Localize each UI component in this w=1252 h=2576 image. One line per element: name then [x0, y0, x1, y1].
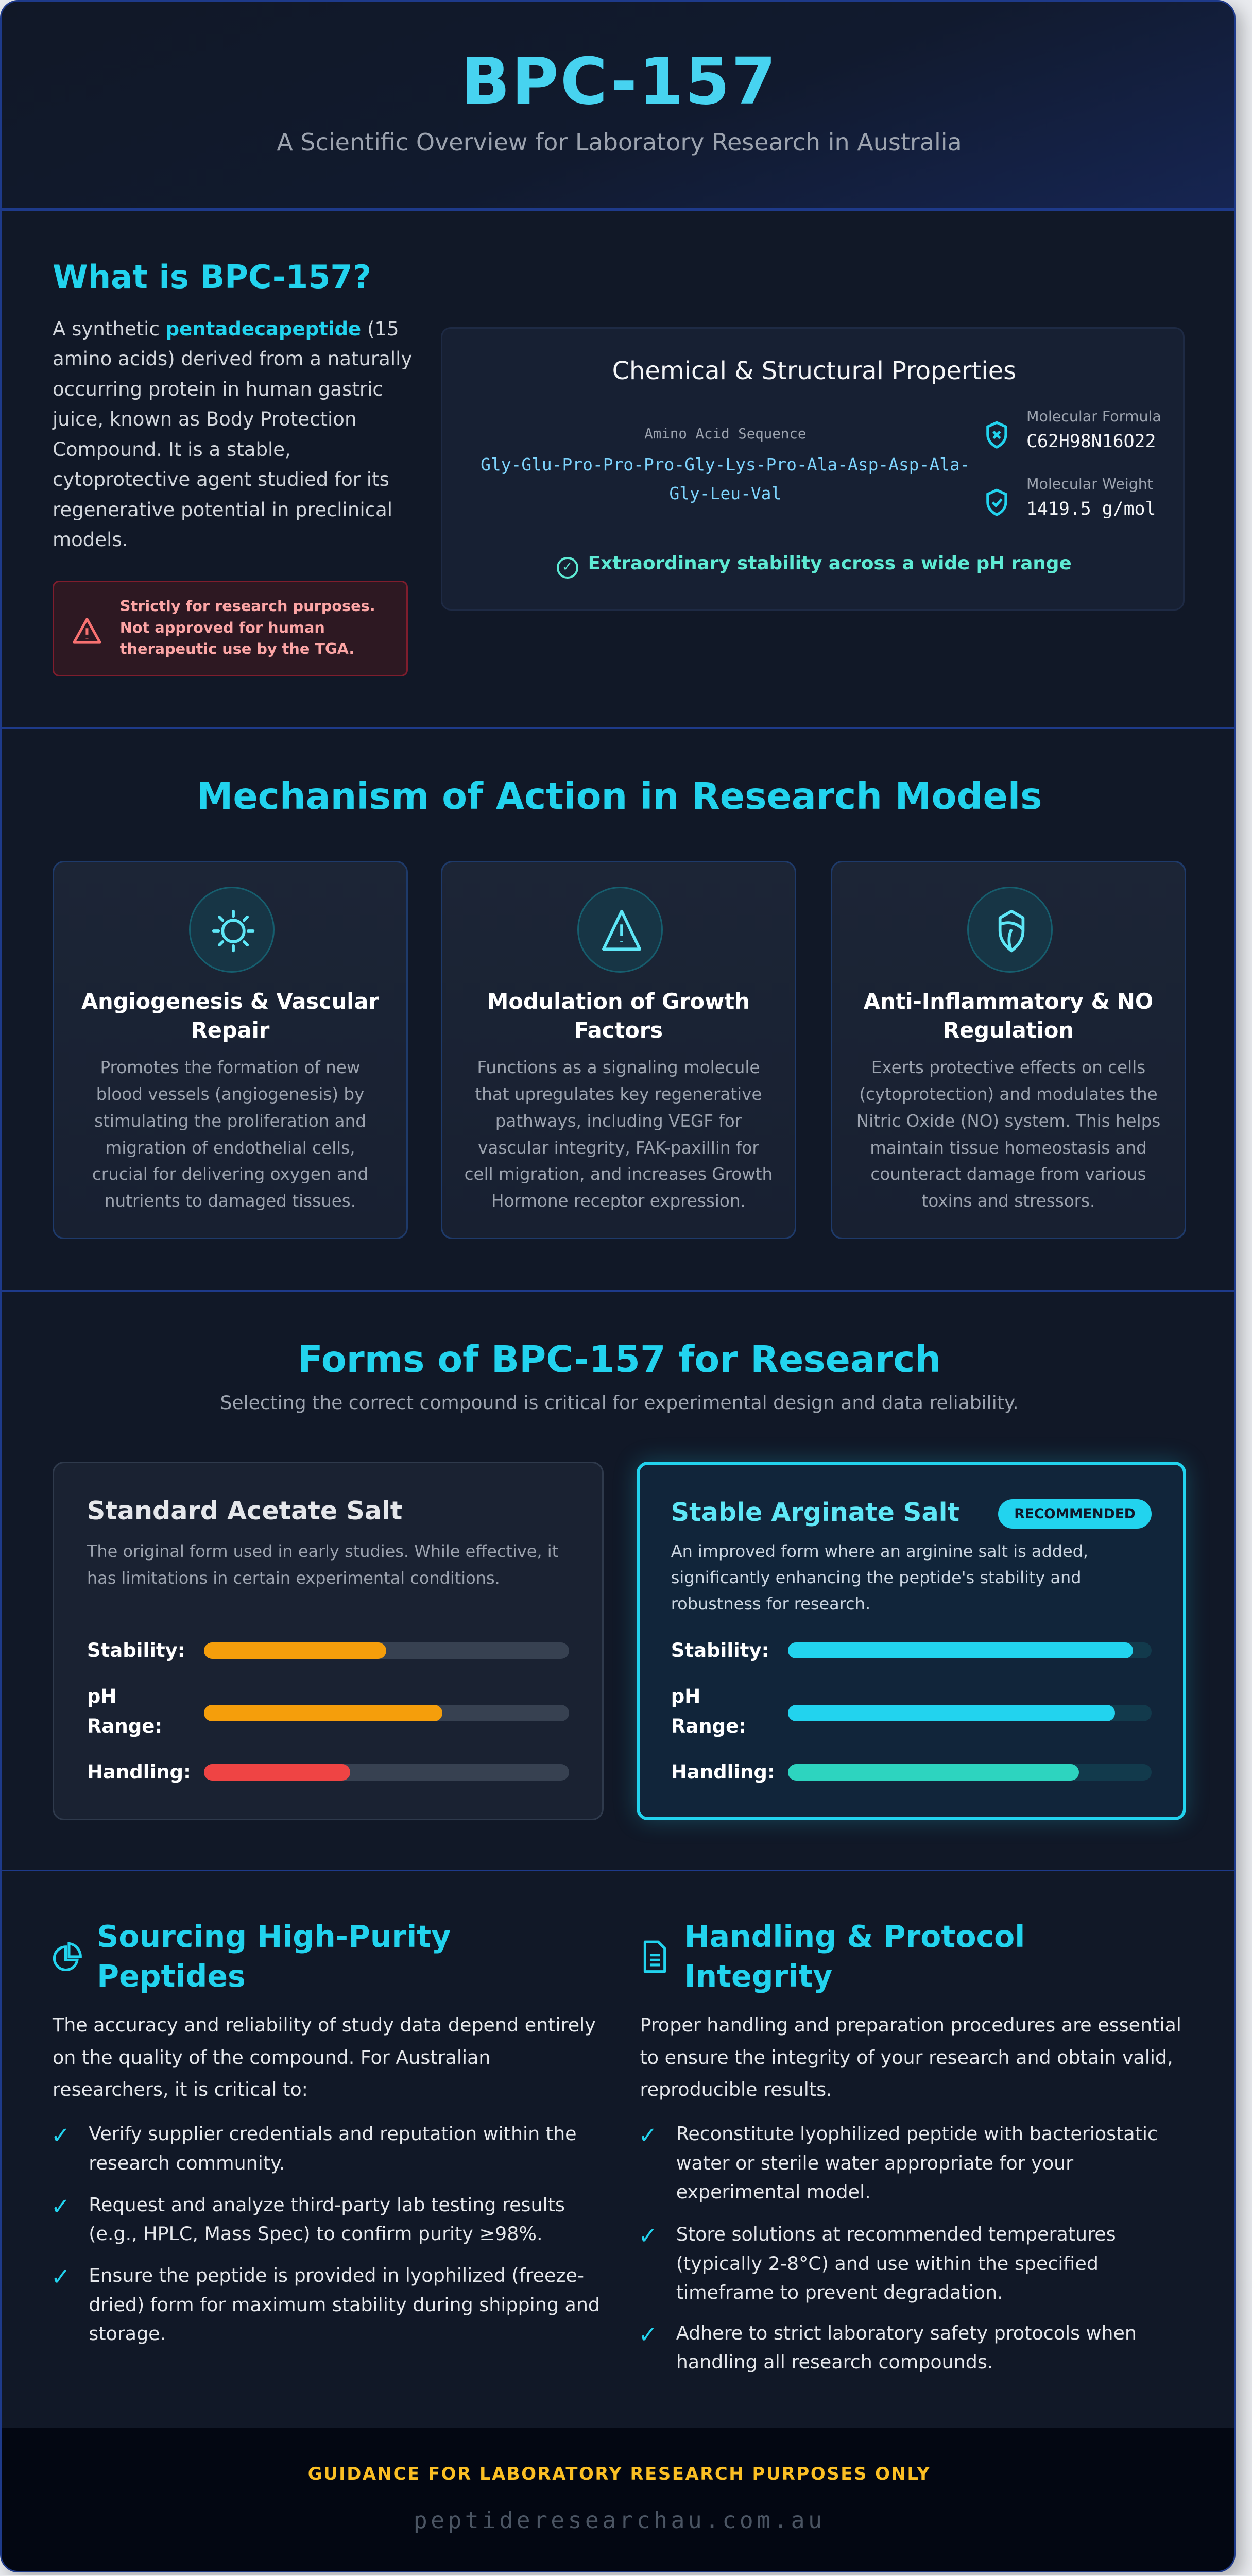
section: what is	[52, 258, 1185, 676]
warning text: Strictly for research purposes. Not approved for human therapeutic use by the TGA.	[120, 597, 375, 657]
panel: chemical properties	[441, 327, 1185, 611]
section: handling: ✓	[638, 2321, 658, 2348]
panel: chemical properties: Molecular Formula	[1026, 408, 1161, 425]
website url: peptideresearchau.com.au	[414, 2506, 825, 2534]
molecular formula	[986, 408, 1161, 452]
card title: Modulation of Growth Factors	[487, 989, 750, 1043]
card text: The original form used in early studies. While effective, it has limitations in certain experimental conditions.	[87, 1541, 558, 1588]
card title: Stable Arginate Salt	[671, 1497, 959, 1527]
section: sourcing: ✓	[51, 2263, 70, 2291]
intro paragraph: Proper handling and preparation procedures are essential to ensure the integrity of your research and obtain valid, reproducible results.	[640, 2014, 1181, 2100]
bar chart: Stability:	[87, 1639, 185, 1662]
amino acid sequence: Amino Acid Sequence	[644, 426, 806, 442]
bar chart	[671, 1639, 1152, 1783]
bar chart: pH	[87, 1685, 116, 1707]
card: angiogenesis	[53, 861, 408, 1239]
warning callout	[53, 581, 408, 676]
card: arginate salt (recommended)	[637, 1462, 1186, 1820]
title: BPC-157	[461, 44, 778, 119]
heading: what is BPC-157: What is BPC-157?	[53, 258, 371, 296]
checklist: Store solutions at recommended temperatures (typically 2-8°C) and use within the specified timeframe to prevent degradation.	[676, 2223, 1116, 2303]
subtitle: A Scientific Overview for Laboratory Research in Australia	[277, 128, 962, 156]
amino acid sequence	[481, 426, 970, 503]
badge: recommended: RECOMMENDED	[1014, 1506, 1136, 1522]
section: handling: ✓	[638, 2122, 658, 2149]
panel heading: Chemical & Structural Properties	[612, 357, 1016, 385]
card: acetate salt	[53, 1462, 604, 1820]
panel: chemical properties: Molecular Weight	[1026, 476, 1153, 493]
description paragraph: A synthetic pentadecapeptide (15 amino acids) derived from a naturally occurring protein in human gastric juice, known as Body Protection Compound. It is a stable, cytoprotective agent studied for its regenerative potential in preclinical models.	[53, 318, 412, 551]
section: sourcing: ✓	[51, 2122, 70, 2149]
intro paragraph: The accuracy and reliability of study data depend entirely on the quality of the compound. For Australian researchers, it is critical to:	[53, 2014, 596, 2100]
card: anti-inflammatory	[831, 861, 1186, 1239]
section: handling	[638, 1919, 1181, 2373]
bar chart: Handling:	[87, 1761, 191, 1783]
heading: mechanism: Mechanism of Action in Research Models	[196, 775, 1042, 818]
heading: handling: Handling & Protocol Integrity	[684, 1919, 1025, 1994]
amino acid sequence: Gly-Leu-Val	[669, 483, 781, 503]
checklist	[51, 2122, 600, 2345]
molecular weight	[986, 476, 1156, 519]
bar chart: Handling:	[671, 1761, 775, 1783]
footer disclaimer: GUIDANCE FOR LABORATORY RESEARCH PURPOSES ONLY	[308, 2464, 931, 2484]
panel: chemical properties: C62H98N16O22	[1026, 431, 1156, 452]
panel: chemical properties: 1419.5 g/mol	[1026, 499, 1156, 519]
header	[2, 2, 1237, 211]
card text: Functions as a signaling molecule that upregulates key regenerative pathways, including VEGF for vascular integrity, FAK-paxillin for cell migration, and increases Growth Hormone receptor expression.	[465, 1058, 773, 1211]
card title: Anti-Inflammatory & NO Regulation	[864, 989, 1153, 1043]
heading: forms: Forms of BPC-157 for Research	[298, 1338, 941, 1381]
checklist: Ensure the peptide is provided in lyophilized (freeze-dried) form for maximum stability during shipping and storage.	[89, 2264, 600, 2345]
subheading: Selecting the correct compound is critical for experimental design and data reliability.	[220, 1392, 1019, 1414]
checklist	[638, 2122, 1158, 2373]
icon: document	[644, 1940, 666, 1973]
checklist: Verify supplier credentials and reputation within the research community.	[89, 2123, 577, 2174]
heading: sourcing: Sourcing High-Purity Peptides	[97, 1919, 451, 1994]
section: forms	[220, 1338, 1019, 1414]
stability note: Extraordinary stability across a wide pH range	[588, 553, 1072, 574]
amino acid sequence: Gly-Glu-Pro-Pro-Pro-Gly-Lys-Pro-Ala-Asp-Asp-Ala-	[481, 454, 970, 474]
icon: pie chart	[53, 1942, 82, 1971]
icon: sun	[189, 887, 275, 973]
badge: recommended	[998, 1499, 1152, 1529]
icon: shield check	[986, 488, 1007, 516]
bar chart: Stability:	[671, 1639, 769, 1662]
bar chart: Range:	[87, 1715, 162, 1737]
card title: Angiogenesis & Vascular Repair	[81, 989, 379, 1043]
icon: triangle	[577, 887, 663, 973]
icon: shield x	[986, 421, 1007, 449]
card text: An improved form where an arginine salt is added, significantly enhancing the peptide's stability and robustness for research.	[671, 1541, 1088, 1614]
bar chart: pH	[671, 1685, 700, 1707]
bar chart: Range:	[671, 1715, 746, 1737]
section: sourcing: ✓	[51, 2193, 70, 2220]
card: growth factors	[441, 861, 796, 1239]
card text: Exerts protective effects on cells (cytoprotection) and modulates the Nitric Oxide (NO) system. This helps maintain tissue homeostasis and counteract damage from various toxins and stressors.	[856, 1058, 1160, 1211]
checklist: Reconstitute lyophilized peptide with bacteriostatic water or sterile water appropriate for your experimental model.	[676, 2123, 1158, 2203]
checklist: Request and analyze third-party lab testing results (e.g., HPLC, Mass Spec) to confirm purity ≥98%.	[89, 2194, 565, 2245]
icon: warning	[73, 618, 101, 644]
stability note: ✓	[562, 559, 573, 574]
card title: Standard Acetate Salt	[87, 1496, 402, 1526]
footer	[2, 2428, 1237, 2574]
bar chart	[87, 1639, 569, 1783]
card text: Promotes the formation of new blood vessels (angiogenesis) by stimulating the proliferation and migration of endothelial cells, crucial for delivering oxygen and nutrients to damaged tissues.	[92, 1058, 368, 1211]
section: handling: ✓	[638, 2222, 658, 2249]
checklist: Adhere to strict laboratory safety protocols when handling all research compounds.	[676, 2322, 1137, 2373]
section: sourcing	[51, 1919, 600, 2345]
icon: shield leaf	[967, 887, 1053, 973]
